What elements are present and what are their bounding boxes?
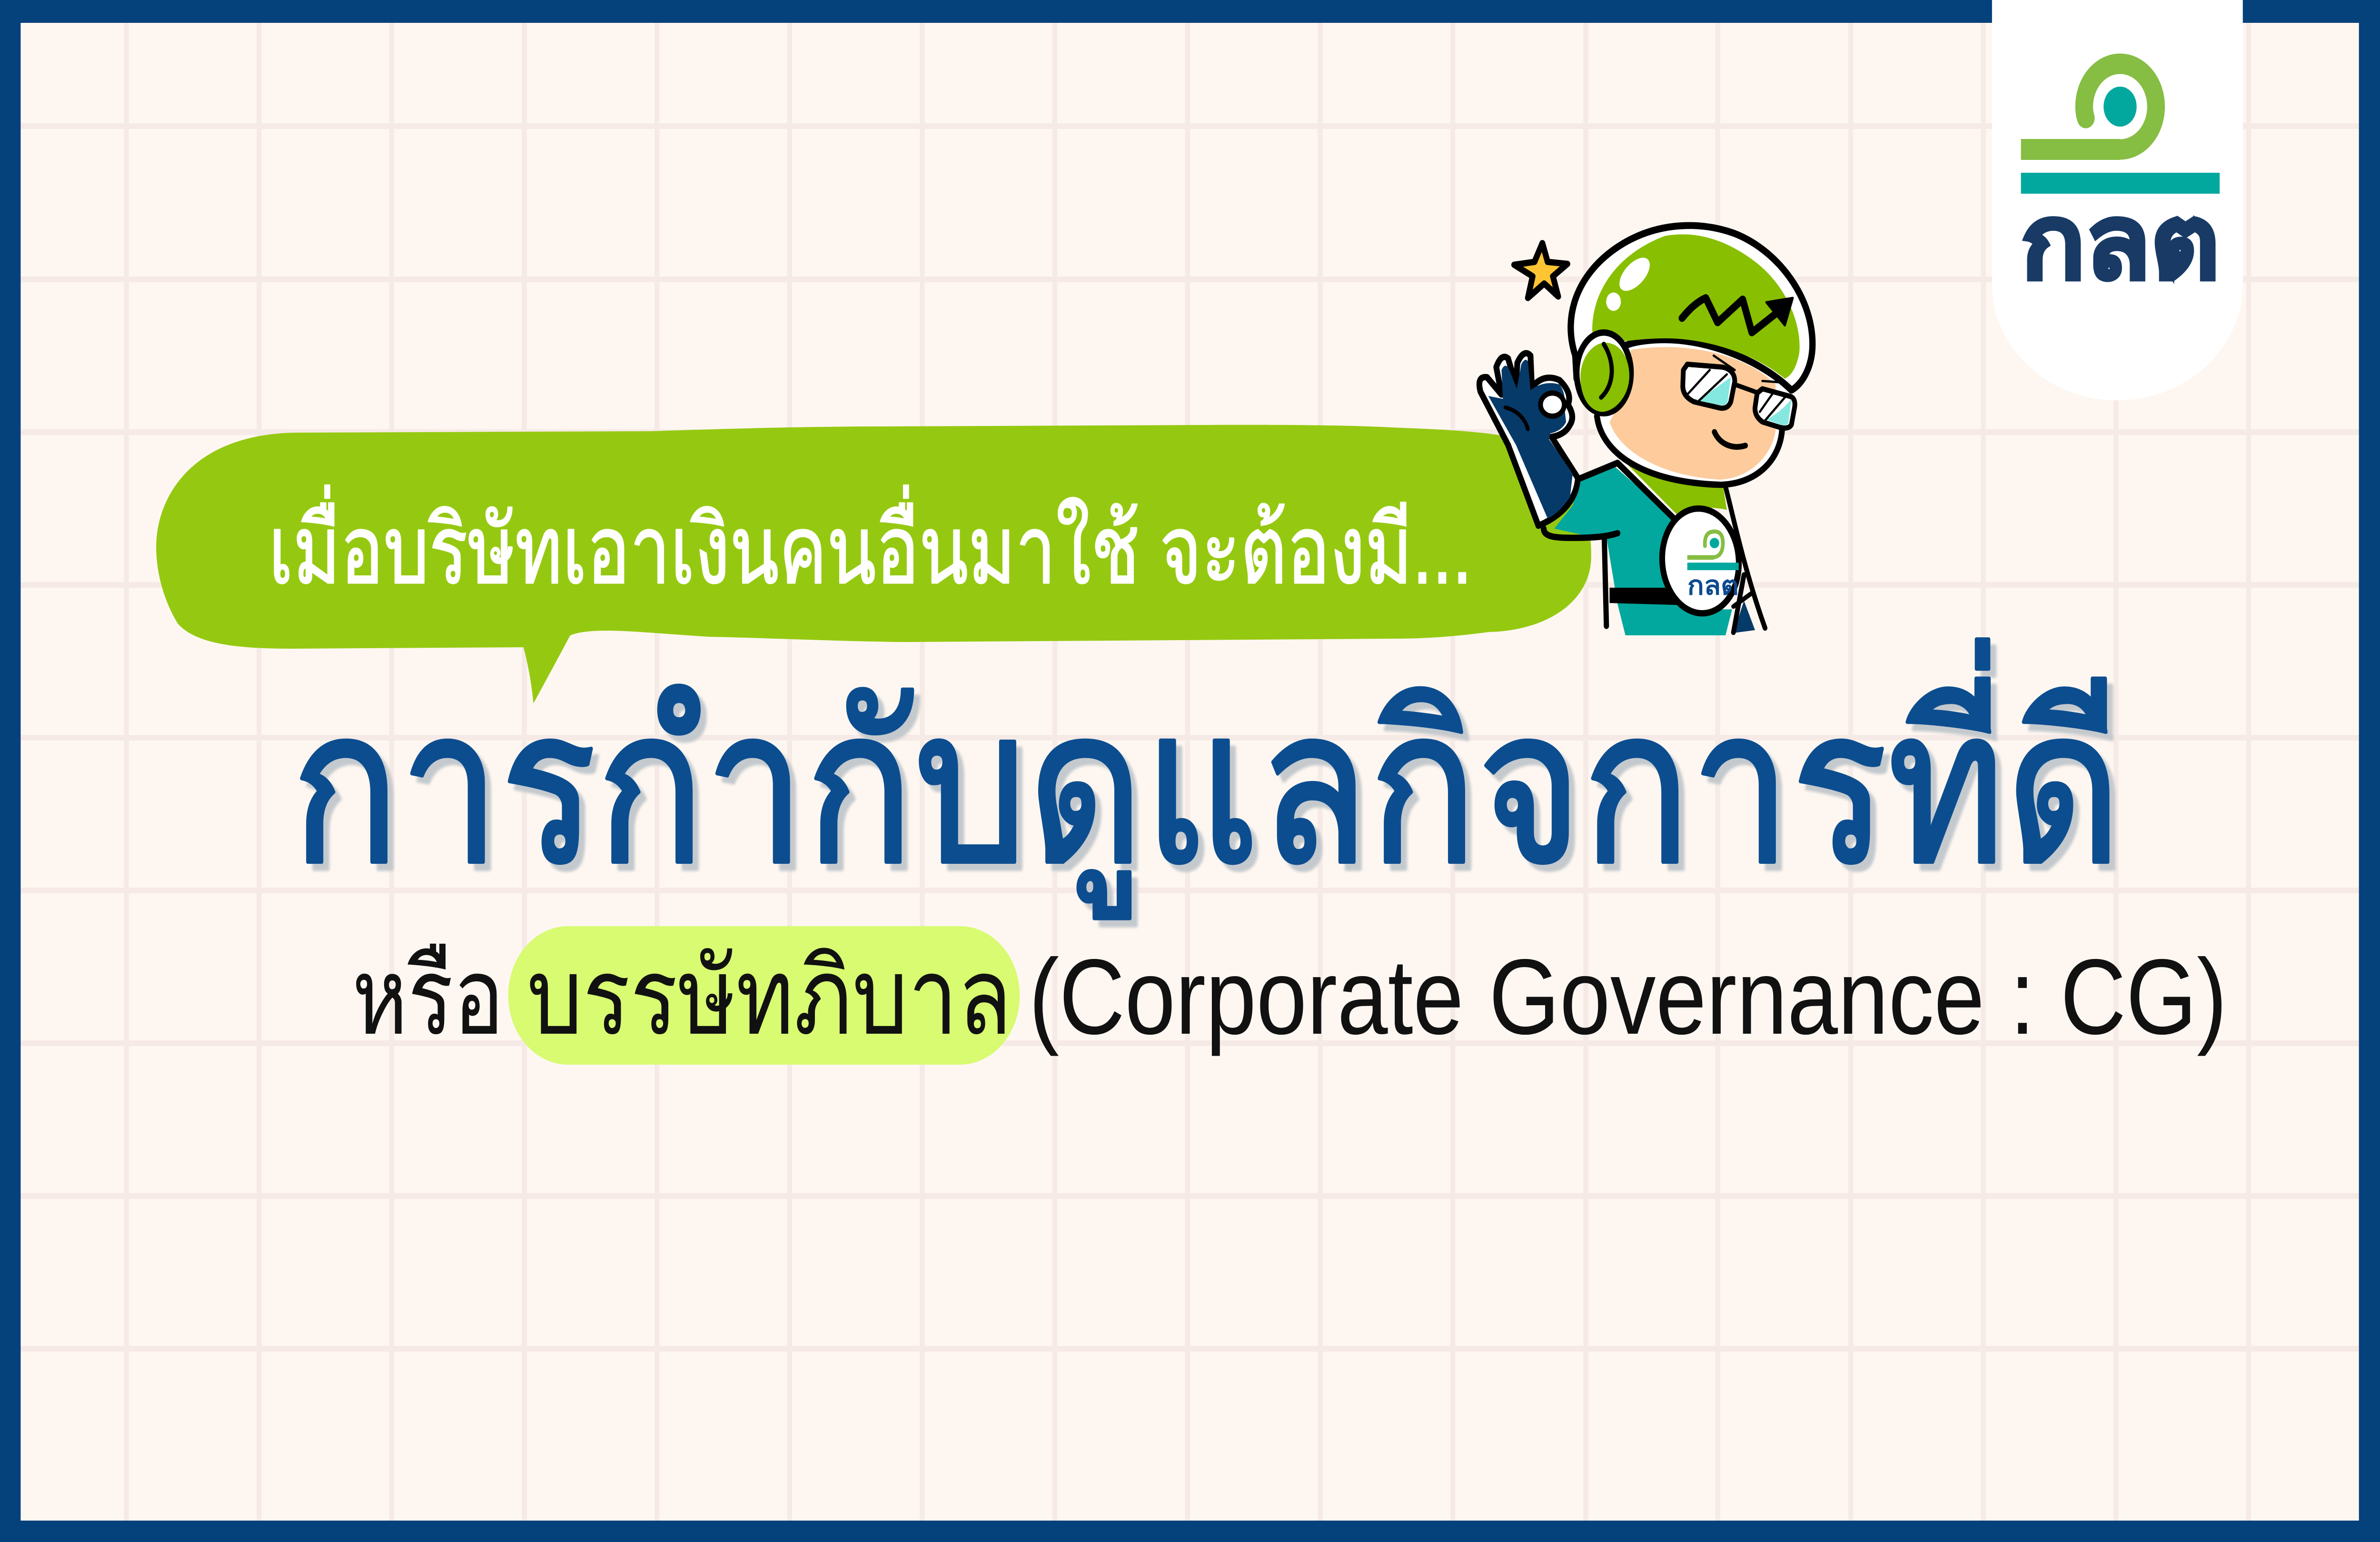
mascot head [1571,226,1813,485]
subtitle line [352,926,2227,1065]
subtitle word: or: หรือ [352,937,504,1057]
mascot glasses [1683,356,1795,428]
speech bubble [156,425,1591,703]
mascot character [1479,226,1813,635]
logo wordmark: กลต [2021,184,2220,300]
highlighted term: บรรษัทภิบาล [527,937,1012,1057]
highlight pill [508,926,1020,1065]
mascot ear cover [1577,333,1631,413]
mascot badge [1657,504,1744,617]
mascot badge: กลต [1687,572,1739,600]
english term: (Corporate Governance : CG) [1029,937,2227,1057]
mascot helmet [1571,226,1813,390]
main title: การกำกับดูแลกิจการที่ดี [291,639,2122,919]
mascot smile [1715,432,1745,447]
logo shield with SEC mark [1992,0,2243,400]
mascot body [1544,463,1765,635]
icon: green spiral [2021,64,2156,160]
icon: yellow star [1514,243,1567,298]
bubble text: เมื่อบริษัทเอาเงินคนอื่นมาใช้ จะต้องมี... [268,485,1472,603]
logo teal bar [2021,173,2220,194]
mascot hand OK gesture [1479,353,1578,526]
